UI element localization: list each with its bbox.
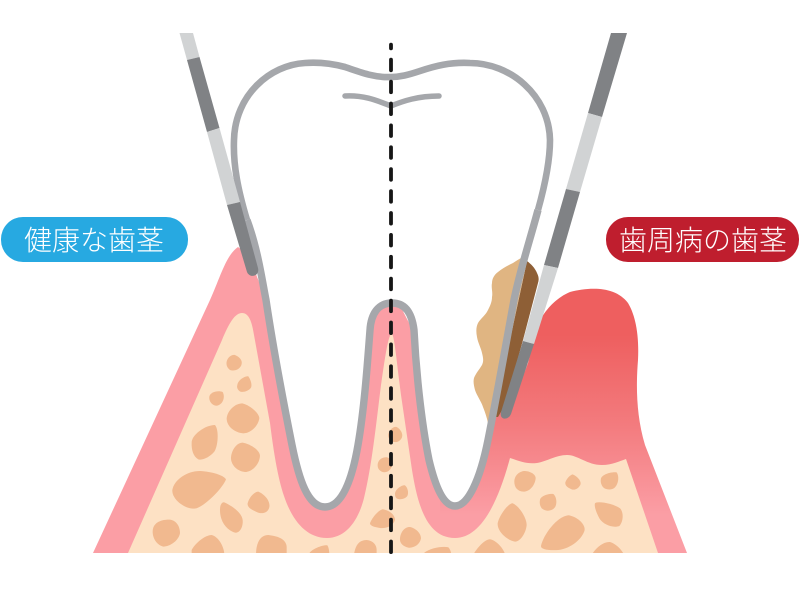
jaw bone [128, 313, 658, 553]
label: periodontal gums [606, 217, 799, 262]
center dashed divider [389, 45, 393, 554]
label: healthy gums: 健康な歯茎 [24, 225, 164, 256]
bone spots [153, 355, 624, 555]
tartar deposit [474, 255, 528, 430]
calculus under the gum line [491, 261, 539, 417]
tooth outline [234, 63, 550, 507]
probe: healthy side [180, 33, 258, 276]
diseased gum (right side, red gradient) [440, 289, 687, 553]
probe: periodontal side [501, 33, 627, 419]
healthy gum (left side, pink) [93, 247, 480, 553]
tooth crown groove [345, 96, 439, 106]
label: periodontal gums: 歯周病の歯茎 [619, 225, 787, 256]
label: healthy gums [1, 217, 188, 262]
tooth body fill [234, 63, 550, 507]
